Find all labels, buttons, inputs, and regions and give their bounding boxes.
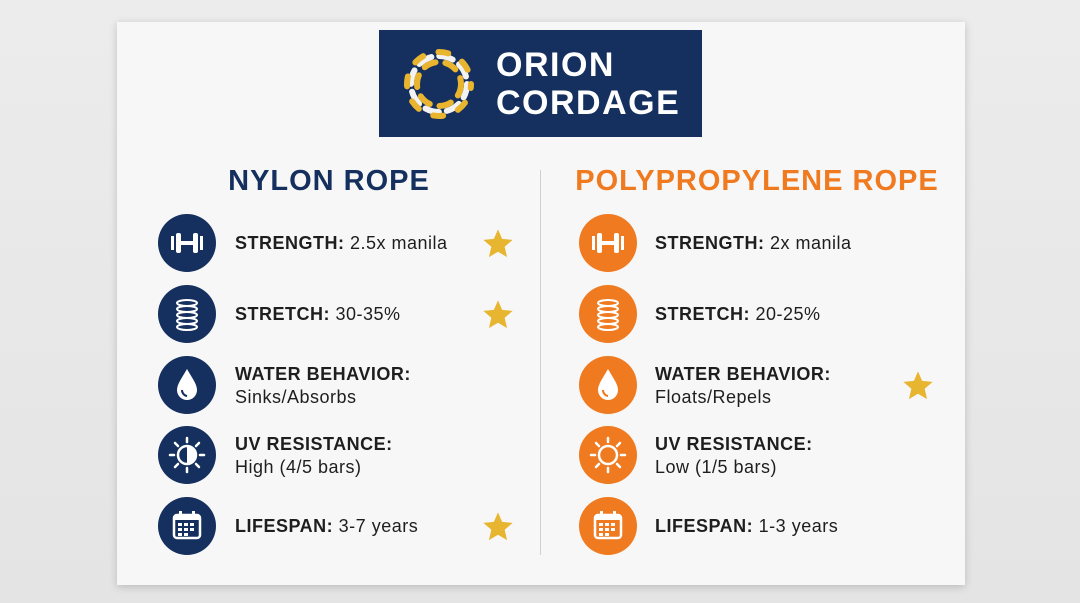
text: water <box>655 364 831 407</box>
icon: drop <box>579 356 637 414</box>
text: strength: STRENGTH: 2.5x manila <box>235 233 448 253</box>
icon: dumbbell <box>158 214 216 272</box>
logo text: CORDAGE <box>496 84 680 122</box>
text: water: Floats/Repels <box>655 387 772 407</box>
text: lifespan: LIFESPAN: 1-3 years <box>655 516 838 536</box>
heading: nylon: NYLON ROPE <box>228 165 430 197</box>
text: lifespan: LIFESPAN: 3-7 years <box>235 516 418 536</box>
text: water: WATER BEHAVIOR: <box>235 364 411 384</box>
text: uv: Low (1/5 bars) <box>655 457 777 477</box>
divider <box>540 170 541 555</box>
panel: polypropylene <box>579 214 933 555</box>
icon: calendar <box>158 497 216 555</box>
icon: drop <box>158 356 216 414</box>
text: uv <box>235 434 393 477</box>
icon: uv <box>579 426 637 484</box>
star <box>483 230 513 257</box>
text: water: Sinks/Absorbs <box>235 387 357 407</box>
icon: calendar <box>579 497 637 555</box>
panel: nylon <box>158 214 513 555</box>
text: uv: UV RESISTANCE: <box>655 434 813 454</box>
text: water: WATER BEHAVIOR: <box>655 364 831 384</box>
logo mark <box>404 49 474 119</box>
icon: spring <box>579 285 637 343</box>
heading: polypropylene: POLYPROPYLENE ROPE <box>575 165 939 197</box>
text: uv: High (4/5 bars) <box>235 457 362 477</box>
text: stretch: STRETCH: 20-25% <box>655 304 821 324</box>
logo text: ORION <box>496 46 615 84</box>
icon: uv <box>158 426 216 484</box>
icon: dumbbell <box>579 214 637 272</box>
star <box>903 372 933 399</box>
text: uv <box>655 434 813 477</box>
text: strength: STRENGTH: 2x manila <box>655 233 852 253</box>
logo <box>379 30 702 137</box>
star <box>483 512 513 540</box>
card <box>117 22 965 585</box>
star <box>483 300 513 328</box>
icon: spring <box>158 285 216 343</box>
text: uv: UV RESISTANCE: <box>235 434 393 454</box>
text: water <box>235 364 411 407</box>
text: stretch: STRETCH: 30-35% <box>235 304 401 324</box>
logo text <box>496 46 680 122</box>
